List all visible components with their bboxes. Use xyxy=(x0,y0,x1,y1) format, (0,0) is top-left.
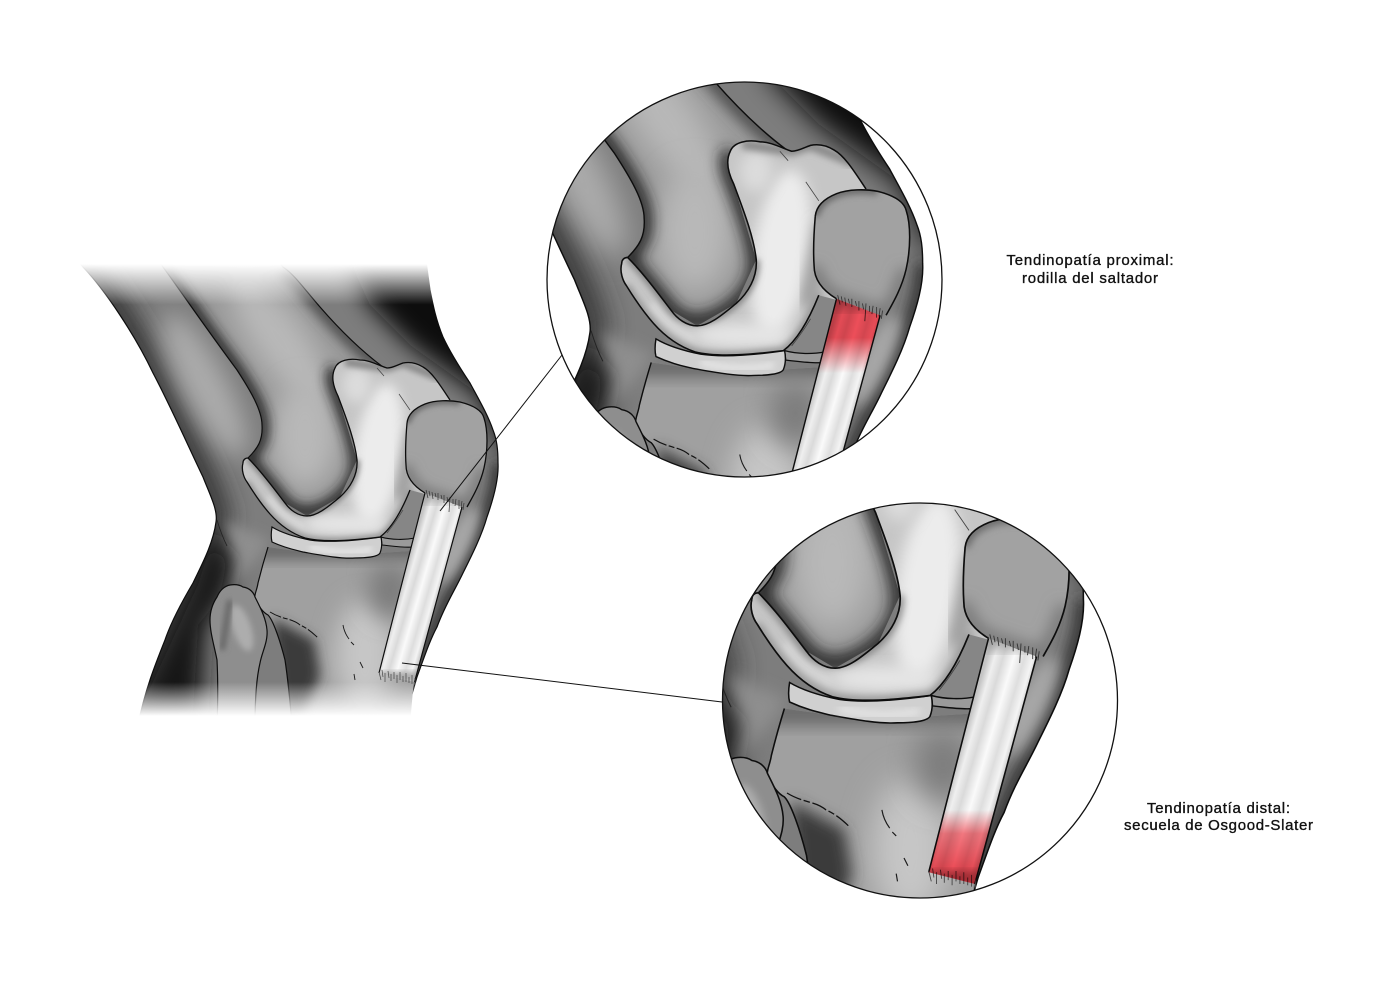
soft tissue silhouette xyxy=(60,240,530,725)
tendon fibres at tibia xyxy=(379,670,415,685)
tibia xyxy=(250,540,430,725)
label: proximal tendinopathy: Tendinopatía proximal: xyxy=(1006,252,1174,269)
main knee illustration xyxy=(82,266,499,715)
callout line to distal detail xyxy=(402,663,722,702)
label: proximal tendinopathy xyxy=(1006,252,1174,287)
label: proximal tendinopathy: rodilla del saltador xyxy=(1022,270,1158,287)
label: distal tendinopathy xyxy=(1124,800,1313,834)
red inflammation: distal tendon xyxy=(928,812,994,884)
label: distal tendinopathy: secuela de Osgood-Slater xyxy=(1124,817,1313,834)
detail circle: distal tendinopathy xyxy=(722,502,1118,899)
patella xyxy=(406,401,487,507)
femur xyxy=(145,240,383,516)
callout line to proximal detail xyxy=(440,355,562,511)
femoral cartilage xyxy=(242,359,450,541)
meniscus xyxy=(271,527,382,558)
posterior meniscus xyxy=(381,537,415,547)
label: distal tendinopathy: Tendinopatía distal: xyxy=(1147,800,1290,817)
fibula xyxy=(210,585,267,725)
detail circle: proximal tendinopathy xyxy=(546,81,943,478)
tendon fibres at patella xyxy=(426,490,464,512)
red inflammation: proximal tendon xyxy=(819,298,880,372)
posterior structure behind tendon xyxy=(380,490,425,539)
patellar tendon xyxy=(370,486,470,685)
